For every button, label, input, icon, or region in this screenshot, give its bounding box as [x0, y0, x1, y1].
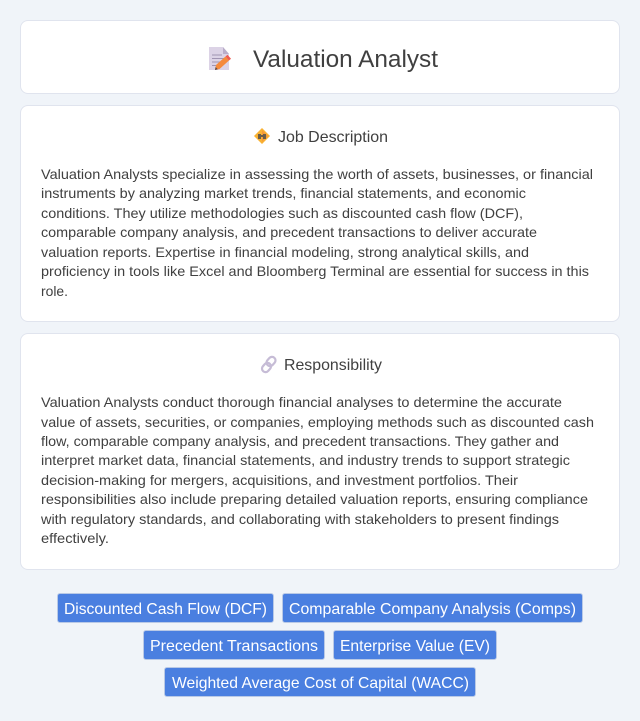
- text block: responsibility: responsibilities also include preparing detailed valuation reports, ensuring compliance: [41, 491, 588, 507]
- tag: Discounted Cash Flow: [57, 593, 274, 623]
- tag: Enterprise Value: Enterprise Value (EV): [340, 638, 490, 655]
- tag: Enterprise Value: [333, 630, 497, 660]
- heading: job description: Job Description: [278, 129, 388, 146]
- panel: job description: [20, 105, 620, 322]
- icon: chain link: [261, 355, 277, 374]
- text block: job description: instruments by analyzing market trends, financial statements, and economic: [41, 185, 526, 201]
- text block: responsibility: effectively.: [41, 530, 109, 546]
- text block: responsibility: flow, comparable company analysis, and precedent transactions. They gather and: [41, 433, 559, 449]
- text block: job description: proficiency in tools like Excel and Bloomberg Terminal are essential for success in this: [41, 263, 589, 279]
- panel: title header: [20, 20, 620, 94]
- text block: responsibility: Valuation Analysts conduct thorough financial analyses to determine the accurate: [41, 394, 562, 410]
- tag: Precedent Transactions: [143, 630, 325, 660]
- text block: job description: Valuation Analysts specialize in assessing the worth of assets, businesses, or financial: [41, 166, 593, 182]
- text block: job description: conditions. They utilize methodologies such as discounted cash flow (DCF),: [41, 205, 523, 221]
- tag: Comparable Company Analysis: [282, 593, 583, 623]
- title: Valuation Analyst: [253, 46, 438, 73]
- text block: responsibility: interpret market data, financial statements, and industry trends to support strategic: [41, 452, 570, 468]
- tag: Comparable Company Analysis: Comparable Company Analysis (Comps): [289, 601, 576, 618]
- icon: orange diamond: [254, 128, 270, 144]
- text block: responsibility: value of assets, securities, or companies, employing methods such as discounted cash: [41, 414, 594, 430]
- text block: job description: comparable company analysis, and precedent transactions to deliver accurate: [41, 224, 537, 240]
- icon: document with pencil: [209, 47, 231, 70]
- text block: responsibility: with regulatory standards, and collaborating with stakeholders to present findings: [40, 511, 559, 527]
- tag: WACC: Weighted Average Cost of Capital (WACC): [172, 675, 469, 692]
- tag: WACC: [164, 667, 476, 697]
- text block: job description: role.: [41, 283, 68, 299]
- text block: responsibility: decision-making for mergers, acquisitions, and investment portfolios. Their: [41, 472, 518, 488]
- text block: job description: valuation reports. Expertise in financial modeling, strong analytical skills, and: [41, 244, 529, 260]
- panel: responsibility: [20, 333, 620, 570]
- text block: responsibility: [40, 394, 594, 546]
- text block: job description: [41, 166, 593, 299]
- tag: Discounted Cash Flow: Discounted Cash Flow (DCF): [64, 601, 267, 618]
- tag: Precedent Transactions: Precedent Transactions: [150, 638, 318, 655]
- heading: responsibility: Responsibility: [284, 357, 382, 374]
